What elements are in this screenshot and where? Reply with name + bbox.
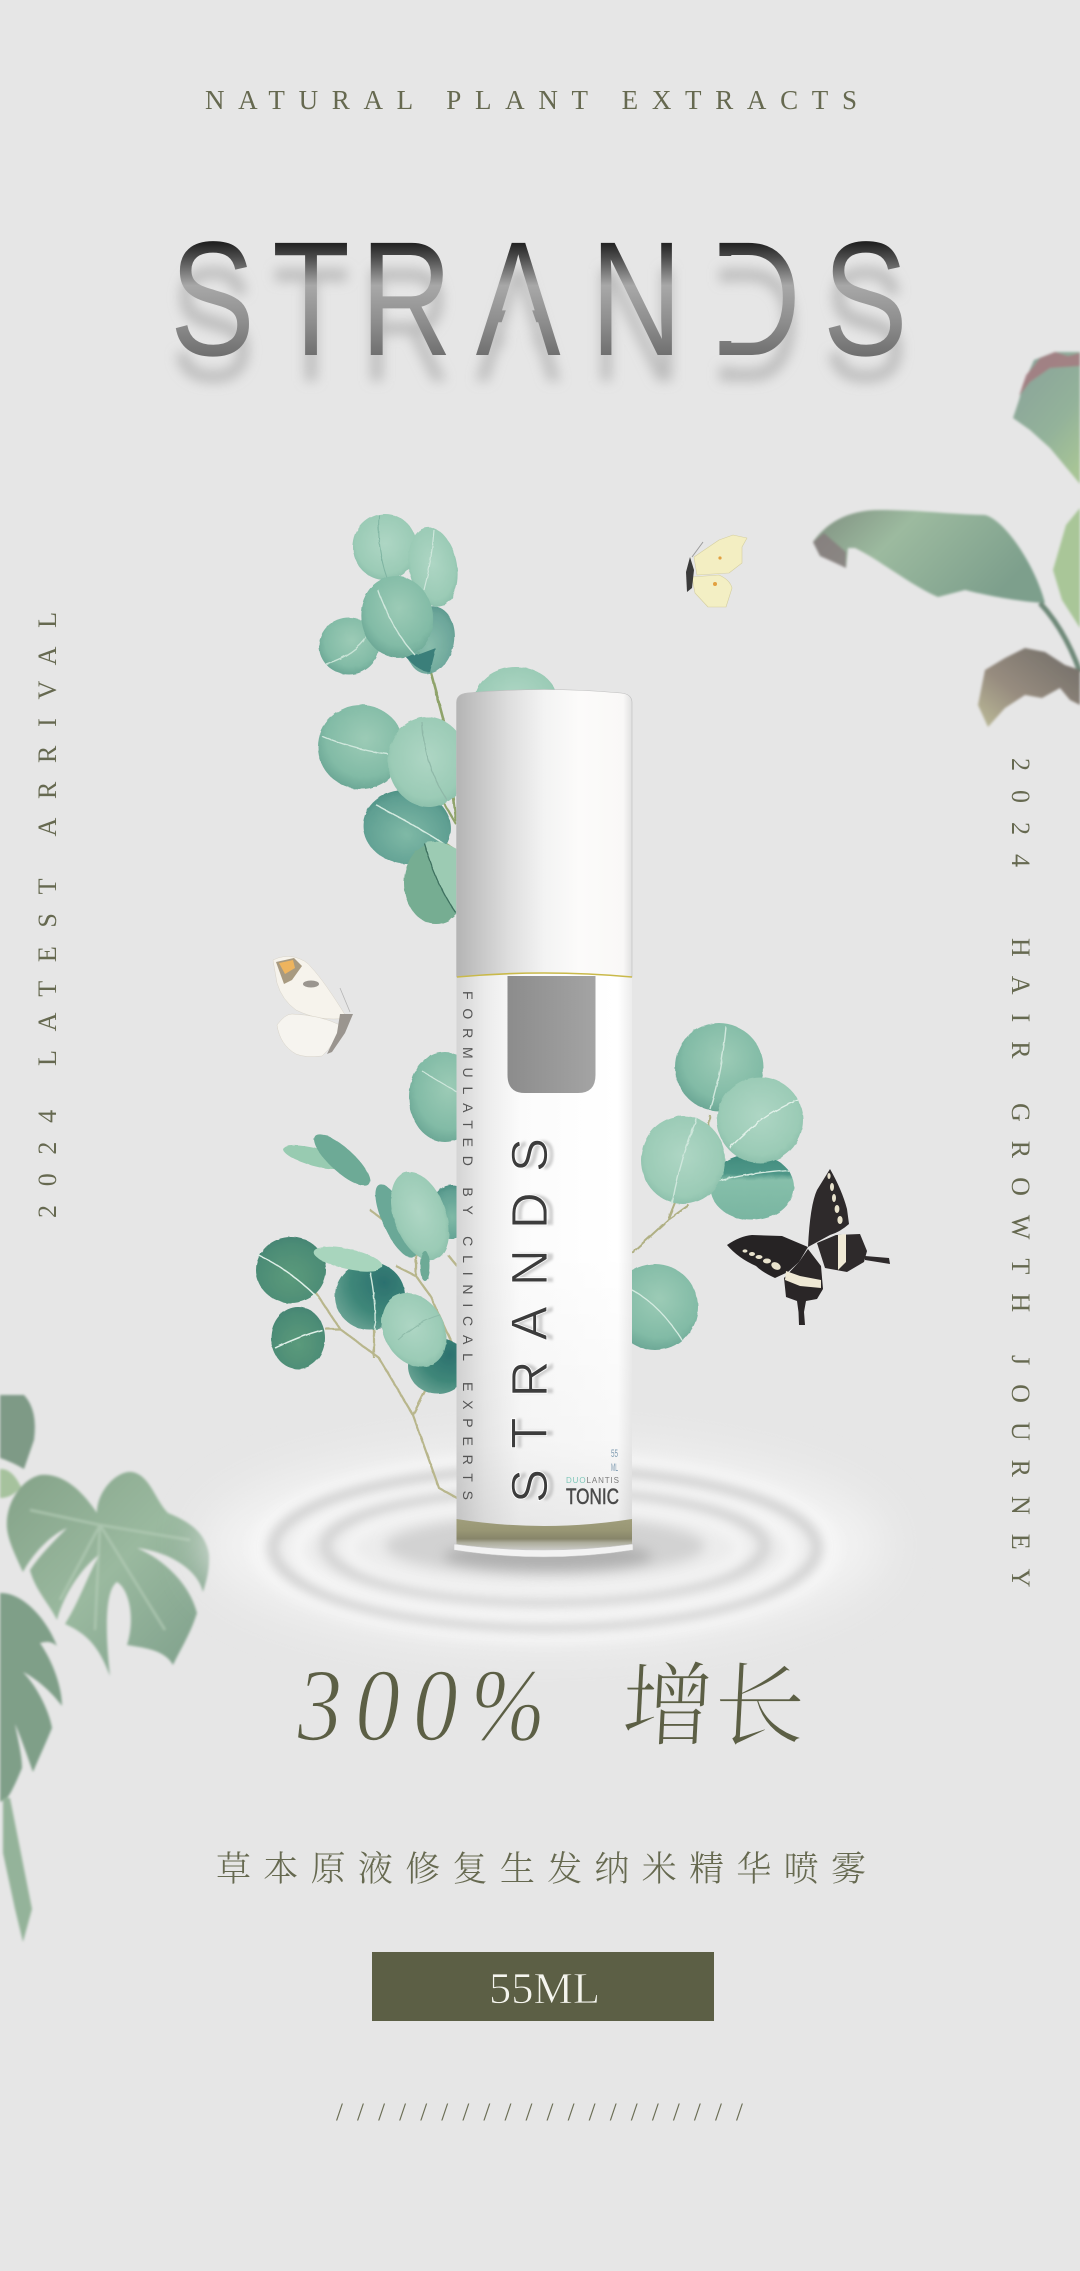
volume badge — [372, 1952, 714, 2021]
top tagline: NATURAL PLANT EXTRACTS — [205, 85, 857, 115]
butterfly: yellow — [686, 535, 747, 607]
growth headline — [297, 1648, 808, 1763]
bottle body — [456, 972, 632, 1527]
product bottle: ML — [611, 1462, 618, 1474]
eucalyptus: upper branch — [318, 514, 557, 924]
title: brand name with emboss shadow: STRANDS — [170, 208, 908, 390]
window — [508, 976, 596, 1093]
bottle brand name: STRANDS — [501, 1138, 558, 1503]
gold seam — [457, 973, 632, 977]
butterfly: white — [273, 956, 353, 1057]
volume badge: 55ML — [489, 1964, 600, 2013]
slash divider: //////////////////// — [336, 2099, 743, 2126]
blurred plant: top right — [813, 352, 1080, 727]
right vertical caption: HAIR — [1006, 938, 1035, 1103]
side claim text: FORMULATED BY CLINICAL EXPERTS — [460, 991, 476, 1500]
tonic label: TONIC — [566, 1484, 619, 1509]
growth headline: 300% — [297, 1648, 545, 1763]
small brand: DUOLANTIS — [566, 1476, 619, 1485]
blurred plant: bottom left — [0, 1395, 209, 1942]
product description: 草本原液修复生发纳米精华喷雾 — [216, 1850, 866, 1889]
bottle brand name: STRANDS — [507, 1138, 564, 1503]
right vertical caption: 2024 — [1006, 758, 1035, 886]
ripple base — [205, 1445, 885, 1645]
volume mark — [611, 1448, 618, 1474]
butterfly: black — [727, 1169, 890, 1325]
right vertical caption: JOURNEY — [1006, 1355, 1035, 1606]
product bottle — [454, 690, 633, 1557]
base ring — [454, 1544, 633, 1557]
title: brand name with emboss shadow: STRANDS — [170, 234, 908, 416]
left vertical caption: 2024 LATEST ARRIVAL — [33, 612, 62, 1218]
growth headline: 增长 — [619, 1656, 808, 1758]
olive base band — [456, 1519, 632, 1552]
eucalyptus: right branch — [612, 1023, 803, 1350]
volume mark: 55 — [611, 1448, 618, 1460]
bottle cap — [456, 690, 632, 977]
right vertical caption: GROWTH — [1006, 1103, 1035, 1357]
eucalyptus: lower left branch — [256, 1052, 481, 1498]
